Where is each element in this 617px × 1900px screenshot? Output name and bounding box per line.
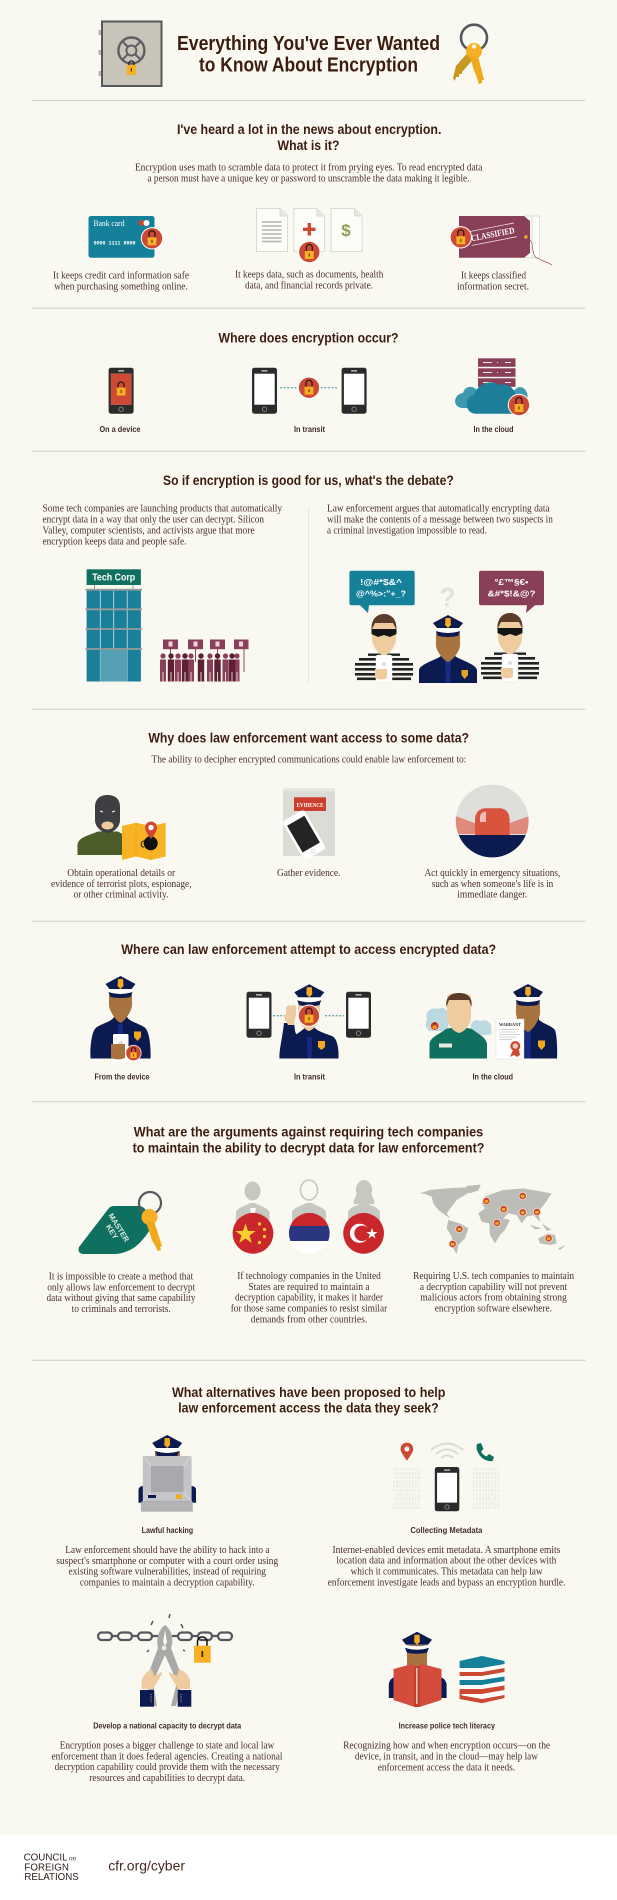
text: malicious actors caption (413, 1271, 574, 1315)
text: tech literacy description: enforcement access the data it needs. (378, 1762, 515, 1773)
text: emergency caption: Act quickly in emergency situations, (424, 868, 560, 879)
text: law enforcement argument: a criminal investigation impossible to read. (327, 525, 487, 536)
icon: officer hacking on laptop (138, 1435, 196, 1512)
text: card caption: It keeps credit card information safe (53, 270, 189, 281)
figure: police officer (419, 615, 477, 683)
text: tech company argument: Valley, computer scientists, and activists argue that more (42, 525, 255, 536)
heading: alternatives: What alternatives have been proposed to help (172, 1385, 445, 1400)
labels: access locations (94, 1071, 513, 1081)
text: national capacity description: decryption capability could provide them with the necessary (55, 1762, 281, 1773)
heading: arguments against (133, 1125, 484, 1155)
icon: safe (98, 22, 162, 86)
text: classified caption (457, 270, 529, 292)
icon: evidence bag with phone: EVIDENCE (296, 802, 324, 809)
text: law enforcement argument (327, 504, 553, 536)
speech bubble: maroon: &#*$!&@? (488, 589, 536, 599)
icon: world map with locks (420, 1185, 566, 1254)
label: police tech literacy: Increase police tech literacy (399, 1721, 495, 1731)
text: other countries caption: for those same companies to resist similar (231, 1304, 388, 1315)
icon: metadata phone, pin, wifi, call: 001100011 (473, 1468, 500, 1472)
text: other countries caption: demands from other countries. (251, 1314, 367, 1325)
question mark: ? (439, 582, 456, 612)
icon: metadata phone, pin, wifi, call (393, 1443, 500, 1511)
icon: phones in transit (252, 368, 367, 414)
logo: Council on Foreign Relations: COUNCIL (24, 1853, 68, 1864)
text: metadata description (328, 1545, 565, 1588)
text: encryption definition (135, 162, 483, 184)
icon: three officials with flags (233, 1180, 384, 1255)
labels: access locations: From the device (94, 1071, 150, 1081)
icon: evidence bag with phone (282, 788, 335, 861)
icon: master key tag (78, 1192, 162, 1254)
figure: man in hoodie and officer with warrant (426, 984, 557, 1059)
label: in the cloud: In the cloud (474, 424, 514, 434)
icon: cloud and servers (455, 358, 530, 416)
text: tech literacy description: device, in transit, and in the cloud—may help law (355, 1752, 538, 1762)
icon: bank card (88, 216, 163, 258)
icon: tech corp building (86, 569, 142, 682)
icon: classified folder: CLASSIFIED (470, 225, 516, 243)
speech bubble: teal: !@#*$&^ (360, 577, 402, 587)
speech bubble: teal (349, 571, 415, 613)
icon: metadata phone, pin, wifi, call: 100101011 (473, 1493, 500, 1498)
text: malicious actors caption: malicious actors from obtaining strong (420, 1293, 567, 1304)
text: other countries caption: States are required to maintain a (248, 1282, 370, 1293)
labels: access locations: In the cloud (473, 1071, 513, 1081)
heading: alternatives (172, 1385, 445, 1415)
icon: metadata phone, pin, wifi, call: 010100110 (473, 1489, 500, 1494)
heading: what is it: What is it? (278, 138, 340, 153)
footer link: cfr.org/cyber (108, 1858, 185, 1874)
text: other countries caption: decryption capability, it makes it harder (235, 1293, 384, 1304)
text: impossible method caption: data without giving that same capability (46, 1293, 196, 1304)
text: lawful hacking description (56, 1545, 278, 1589)
speech bubble: teal: @^%>:"+_? (356, 589, 406, 599)
text: operational details caption: or other criminal activity. (74, 890, 168, 901)
text: documents caption: data, and financial records private. (245, 281, 373, 292)
text: gather evidence caption: Gather evidence. (277, 868, 340, 879)
icon: metadata phone, pin, wifi, call: 110010100 (393, 1498, 421, 1503)
text: encryption definition: Encryption uses math to scramble data to protect it from prying eyes. To read encrypted data (135, 162, 483, 173)
text: emergency caption (424, 868, 560, 901)
icon: metadata phone, pin, wifi, call: 110010100 (473, 1498, 500, 1503)
text: metadata description: location data and information about the other devices with (336, 1556, 556, 1567)
text: tech literacy description (343, 1741, 551, 1773)
icon: metadata phone, pin, wifi, call: 110010100 (393, 1506, 421, 1511)
icon: metadata phone, pin, wifi, call: 010100101 (473, 1480, 500, 1485)
icon: bank card: Bank card (94, 219, 124, 228)
text: tech company argument: Some tech companies are launching products that automatically (42, 504, 283, 515)
title (177, 33, 440, 77)
text: ability to decipher: The ability to decipher encrypted communications could enable law enforcement to: (152, 755, 466, 766)
icon: master key tag: MASTER (107, 1212, 131, 1244)
icon: documents: $ (341, 221, 351, 240)
text: card caption: when purchasing something online. (54, 281, 188, 292)
heading: what is it: I've heard a lot in the news about encryption. (177, 122, 441, 137)
text: operational details caption (51, 868, 192, 901)
icon: metadata phone, pin, wifi, call: 100101011 (473, 1485, 500, 1490)
icon: metadata phone, pin, wifi, call: 110010100 (393, 1476, 421, 1481)
heading: what is it (177, 122, 441, 153)
icon: metadata phone, pin, wifi, call: 010100101 (393, 1480, 421, 1485)
figure: officer with device (90, 976, 151, 1062)
icon: emergency siren (456, 784, 529, 858)
heading: why does law enforcement want access: Why does law enforcement want access to some data? (148, 730, 469, 745)
text: impossible method caption (46, 1271, 196, 1315)
heading: where does encryption occur: Where does encryption occur? (218, 331, 398, 346)
icon: metadata phone, pin, wifi, call: 100101011 (473, 1502, 500, 1507)
text: impossible method caption: It is impossible to create a method that (49, 1271, 193, 1282)
text: national capacity description (52, 1740, 283, 1784)
text: metadata description: which it communicates. This metadata can help law (351, 1567, 543, 1578)
figure: man in hoodie and officer with warrant: WARRANT (499, 1022, 521, 1027)
icon: phone on a device (109, 368, 134, 414)
text: emergency caption: such as when someone's life is in (432, 879, 553, 890)
text: documents caption: It keeps data, such as documents, health (235, 270, 383, 281)
text: law enforcement argument: Law enforcement argues that automatically encrypting data (327, 504, 550, 515)
text: impossible method caption: only allows law enforcement to decrypt (47, 1282, 195, 1293)
flag: Serbia (288, 1212, 331, 1255)
label: collecting metadata: Collecting Metadata (410, 1525, 483, 1535)
icon: metadata phone, pin, wifi, call: 100101011 (393, 1502, 421, 1507)
labels: access locations: In transit (294, 1071, 325, 1081)
text: national capacity description: Encryption poses a bigger challenge to state and local law (60, 1740, 275, 1751)
heading: the debate: So if encryption is good for us, what's the debate? (163, 473, 454, 488)
icon: protesters with signs (160, 640, 248, 682)
icon: metadata phone, pin, wifi, call: 100101011 (393, 1493, 421, 1498)
text: emergency caption: immediate danger. (457, 890, 527, 901)
heading: arguments against: What are the arguments against requiring tech companies (134, 1125, 483, 1140)
icon: metadata phone, pin, wifi, call: 100101011 (393, 1472, 421, 1477)
icon: classified folder (450, 216, 552, 265)
logo: Council on Foreign Relations: FOREIGN (24, 1863, 69, 1874)
heading: arguments against: to maintain the ability to decrypt data for law enforcement? (133, 1140, 484, 1155)
logo: Council on Foreign Relations: on (69, 1855, 76, 1863)
text: national capacity description: resources and capabilities to decrypt data. (89, 1773, 245, 1784)
icon: keys on a ring (453, 25, 487, 84)
icon: master key tag: KEY (104, 1223, 120, 1241)
icon: masked terrorist with map and bomb (78, 795, 166, 860)
footer (0, 1835, 617, 1900)
text: malicious actors caption: encryption software elsewhere. (435, 1304, 552, 1315)
icon: metadata phone, pin, wifi, call: 100101011 (473, 1472, 500, 1477)
label: in transit: In transit (294, 424, 325, 434)
title: Everything You've Ever Wanted (177, 33, 440, 55)
text: lawful hacking description: companies to maintain a decryption capability. (80, 1578, 255, 1589)
text: lawful hacking description: suspect's smartphone or computer with a court order using (56, 1556, 278, 1567)
logo: Council on Foreign Relations: RELATIONS (24, 1872, 79, 1883)
text: tech company argument: encrypt data in a way that only the user can decrypt. Silicon (42, 515, 264, 526)
label: lawful hacking: Lawful hacking (142, 1525, 193, 1535)
text: metadata description: enforcement investigate leads and bypass an encryption hurdle. (328, 1577, 565, 1588)
icon: metadata phone, pin, wifi, call: 110010100 (473, 1476, 500, 1481)
icon: bank card: 0000 1111 8888 (94, 240, 136, 246)
heading: where can law enforcement access: Where can law enforcement attempt to access encrypted data? (121, 942, 496, 957)
heading: alternatives: law enforcement access the data they seek? (178, 1400, 439, 1415)
text: lawful hacking description: existing software vulnerabilities, instead of requiring (68, 1567, 266, 1578)
text: tech literacy description: Recognizing how and when encryption occurs—on the (343, 1741, 551, 1752)
icon: tech corp building: Tech Corp (92, 572, 135, 584)
text: malicious actors caption: Requiring U.S. tech companies to maintain (413, 1271, 574, 1282)
text: metadata description: Internet-enabled devices emit metadata. A smartphone emits (332, 1545, 560, 1556)
title: to Know About Encryption (199, 55, 418, 77)
text: national capacity description: enforcement than it does federal agencies. Creating a national (52, 1751, 283, 1762)
text: tech company argument: encryption keeps data and people safe. (42, 536, 186, 547)
icon: metadata phone, pin, wifi, call: 010100110 (393, 1489, 421, 1494)
speech bubble: maroon: °£™§€• (494, 577, 528, 587)
icon: officer reading book and book stack (389, 1632, 504, 1707)
icon: metadata phone, pin, wifi, call: 110010100 (473, 1506, 500, 1511)
figure: officer intercepting transit (246, 984, 371, 1058)
text: law enforcement argument: will make the contents of a message between two suspects in (327, 515, 553, 526)
text: malicious actors caption: a decryption capability will not prevent (420, 1282, 567, 1293)
text: lawful hacking description: Law enforcement should have the ability to hack into a (65, 1545, 270, 1556)
logo: Council on Foreign Relations (24, 1853, 79, 1883)
text: encryption definition: a person must have a unique key or password to unscramble the data making it legible. (148, 173, 470, 184)
text: impossible method caption: to criminals and terrorists. (72, 1304, 171, 1315)
label: national capacity: Develop a national capacity to decrypt data (93, 1720, 241, 1730)
text: tech company argument (42, 504, 283, 547)
icon: bolt cutter and chain (98, 1614, 232, 1707)
text: operational details caption: Obtain operational details or (67, 868, 176, 879)
text: card caption (53, 270, 189, 292)
speech bubble: maroon (479, 571, 544, 613)
text: operational details caption: evidence of terrorist plots, espionage, (51, 879, 192, 890)
flag: China (233, 1213, 273, 1254)
text: other countries caption: If technology companies in the United (237, 1271, 381, 1282)
figure: suspect right (481, 613, 539, 682)
text: other countries caption (231, 1271, 388, 1325)
icon: metadata phone, pin, wifi, call: 001101011 (393, 1468, 421, 1472)
text: classified caption: It keeps classified (461, 270, 526, 281)
flag: Turkey (343, 1213, 384, 1254)
icon: documents (256, 208, 362, 263)
figure: suspect left (355, 614, 413, 683)
text: documents caption (235, 270, 383, 292)
text: classified caption: information secret. (457, 281, 529, 292)
icon: metadata phone, pin, wifi, call: 100101011 (393, 1485, 421, 1490)
label: on a device: On a device (100, 424, 141, 434)
